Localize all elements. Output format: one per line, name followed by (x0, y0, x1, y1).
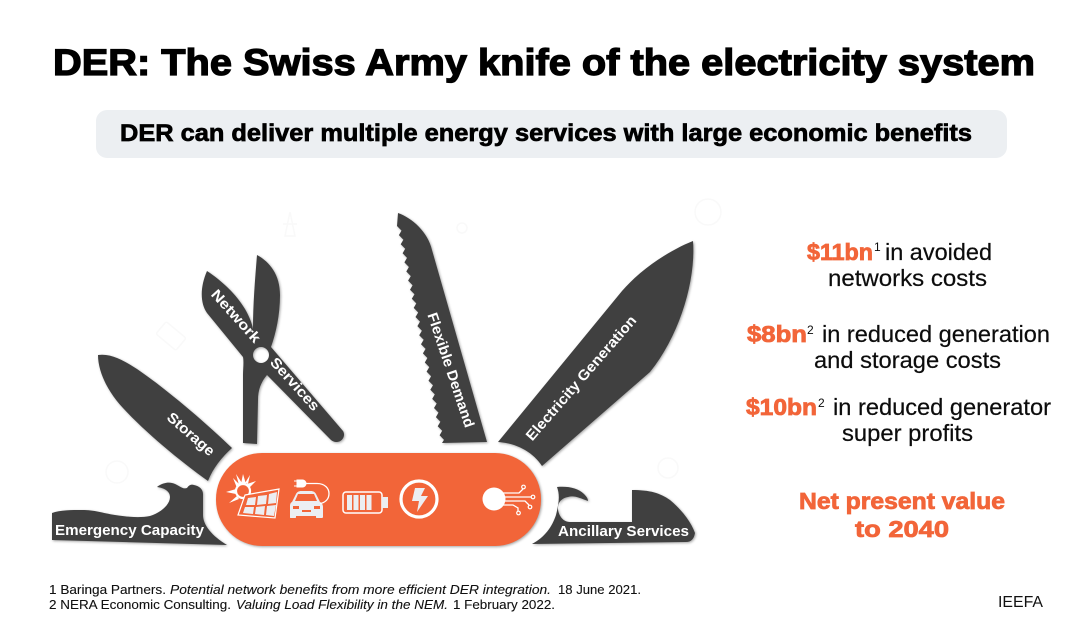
tool: emergency capacity: Emergency Capacity (55, 523, 204, 539)
icon: electric car (290, 480, 329, 518)
callout: net present value: Net present value (799, 488, 1005, 514)
callout: $11bn avoided network costs: networks costs (828, 265, 987, 291)
blade: storage: Storage (163, 410, 217, 460)
icon: battery (343, 492, 388, 513)
footnotes: 2 NERA Economic Consulting. (49, 598, 231, 612)
callout: $8bn reduced generation and storage costs: 2 (807, 323, 814, 337)
callout: $11bn avoided network costs (807, 239, 992, 291)
footnotes (49, 583, 641, 612)
callout: $10bn reduced generator super profits: 2 (818, 396, 825, 410)
callout: $8bn reduced generation and storage costs (747, 321, 1050, 373)
blade: electricity generation: Electricity Generation (523, 313, 640, 444)
tool: emergency capacity (52, 483, 227, 545)
blade: network services scissors: Services (266, 355, 322, 415)
callout: $11bn avoided network costs: in avoided (885, 239, 992, 265)
icon: circuit lines (503, 485, 535, 515)
faint background icons (106, 199, 721, 483)
tool: ancillary services: Ancillary Services (558, 524, 689, 540)
subtitle banner (96, 110, 1007, 158)
callout: $10bn reduced generator super profits (746, 394, 1051, 446)
blade: storage (98, 355, 232, 481)
callout: $10bn reduced generator super profits: $10bn (746, 394, 817, 420)
callout: $8bn reduced generation and storage costs: and storage costs (814, 347, 1001, 373)
knife pivot hole (482, 488, 506, 510)
blade: network services scissors: Network (207, 287, 264, 347)
knife handle (216, 453, 541, 546)
icon: solar panel (226, 474, 279, 518)
callout: net present value (799, 488, 1005, 542)
footnotes: 1 February 2022. (453, 598, 555, 612)
blade: network services scissors (202, 255, 344, 444)
callout: net present value: to 2040 (855, 516, 949, 542)
blade: flexible demand saw (397, 213, 487, 443)
source label: IEEFA (998, 594, 1043, 611)
callout: $10bn reduced generator super profits: in reduced generator (833, 394, 1051, 420)
swiss army knife diagram (52, 213, 695, 546)
footnotes: Potential network benefits from more efficient DER integration. (170, 583, 551, 597)
callout: $8bn reduced generation and storage costs: in reduced generation (822, 321, 1050, 347)
blade: electricity generation (498, 241, 693, 466)
tool: ancillary services (532, 487, 695, 544)
footnotes: Valuing Load Flexibility in the NEM. (236, 598, 448, 612)
subtitle banner: DER can deliver multiple energy services with large economic benefits (120, 120, 972, 147)
blade: flexible demand saw: Flexible Demand (423, 311, 477, 430)
callout: $10bn reduced generator super profits: super profits (842, 420, 973, 446)
title: DER: The Swiss Army knife of the electricity system (53, 41, 1035, 83)
callout: $11bn avoided network costs: $11bn (807, 239, 873, 265)
callout: $8bn reduced generation and storage costs: $8bn (747, 321, 807, 347)
callout: $11bn avoided network costs: 1 (874, 240, 881, 254)
footnotes: 18 June 2021. (558, 583, 641, 597)
icon: lightning circle (401, 481, 437, 517)
footnotes: 1 Baringa Partners. (49, 583, 166, 597)
